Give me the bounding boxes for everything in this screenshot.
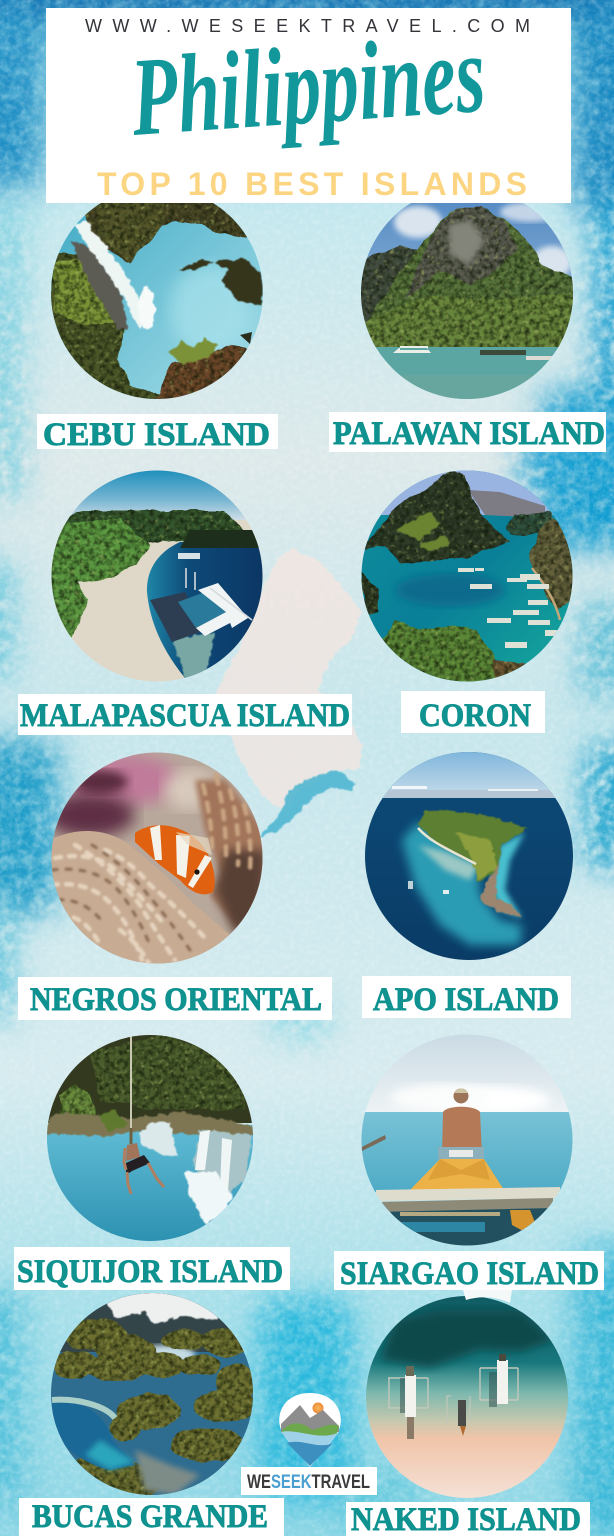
photo: Cebu Island waterfall (50, 187, 264, 402)
label: Negros Oriental: NEGROS ORIENTAL (30, 982, 322, 1018)
subtitle: TOP 10 BEST ISLANDS (97, 166, 527, 202)
white mark above photo (463, 1290, 512, 1303)
logo: WeSeekTravel (241, 1393, 377, 1495)
photo: Coron lagoon (360, 470, 575, 685)
label: Bucas Grande: BUCAS GRANDE (32, 1499, 268, 1535)
label: Siquijor Island: SIQUIJOR ISLAND (17, 1254, 283, 1290)
label: Malapascua Island: MALAPASCUA ISLAND (20, 698, 350, 734)
photo: Palawan Island mountain (361, 203, 573, 399)
blue paint streak (258, 770, 356, 838)
header panel (46, 8, 571, 203)
label: Coron: CORON (419, 698, 531, 734)
pale pink map shape (216, 548, 362, 812)
icon: map pin (279, 1393, 341, 1467)
photo: Siquijor waterfall rope swing (45, 1033, 255, 1245)
label: Apo Island: APO ISLAND (373, 982, 559, 1018)
photo: Naked Island boats (364, 1294, 570, 1500)
photo: Malapascua Island beach (50, 470, 264, 684)
photo: Apo Island aerial (364, 750, 574, 962)
label: Cebu Island: CEBU ISLAND (43, 417, 270, 453)
photo: Bucas Grande islets (50, 1292, 257, 1502)
website url: WWW.WESEEKTRAVEL.COM (85, 16, 530, 36)
photo: Siargao boat (360, 1033, 574, 1248)
photo: Negros Oriental clownfish (45, 750, 265, 966)
wordmark: WESEEKTRAVEL (247, 1472, 370, 1493)
